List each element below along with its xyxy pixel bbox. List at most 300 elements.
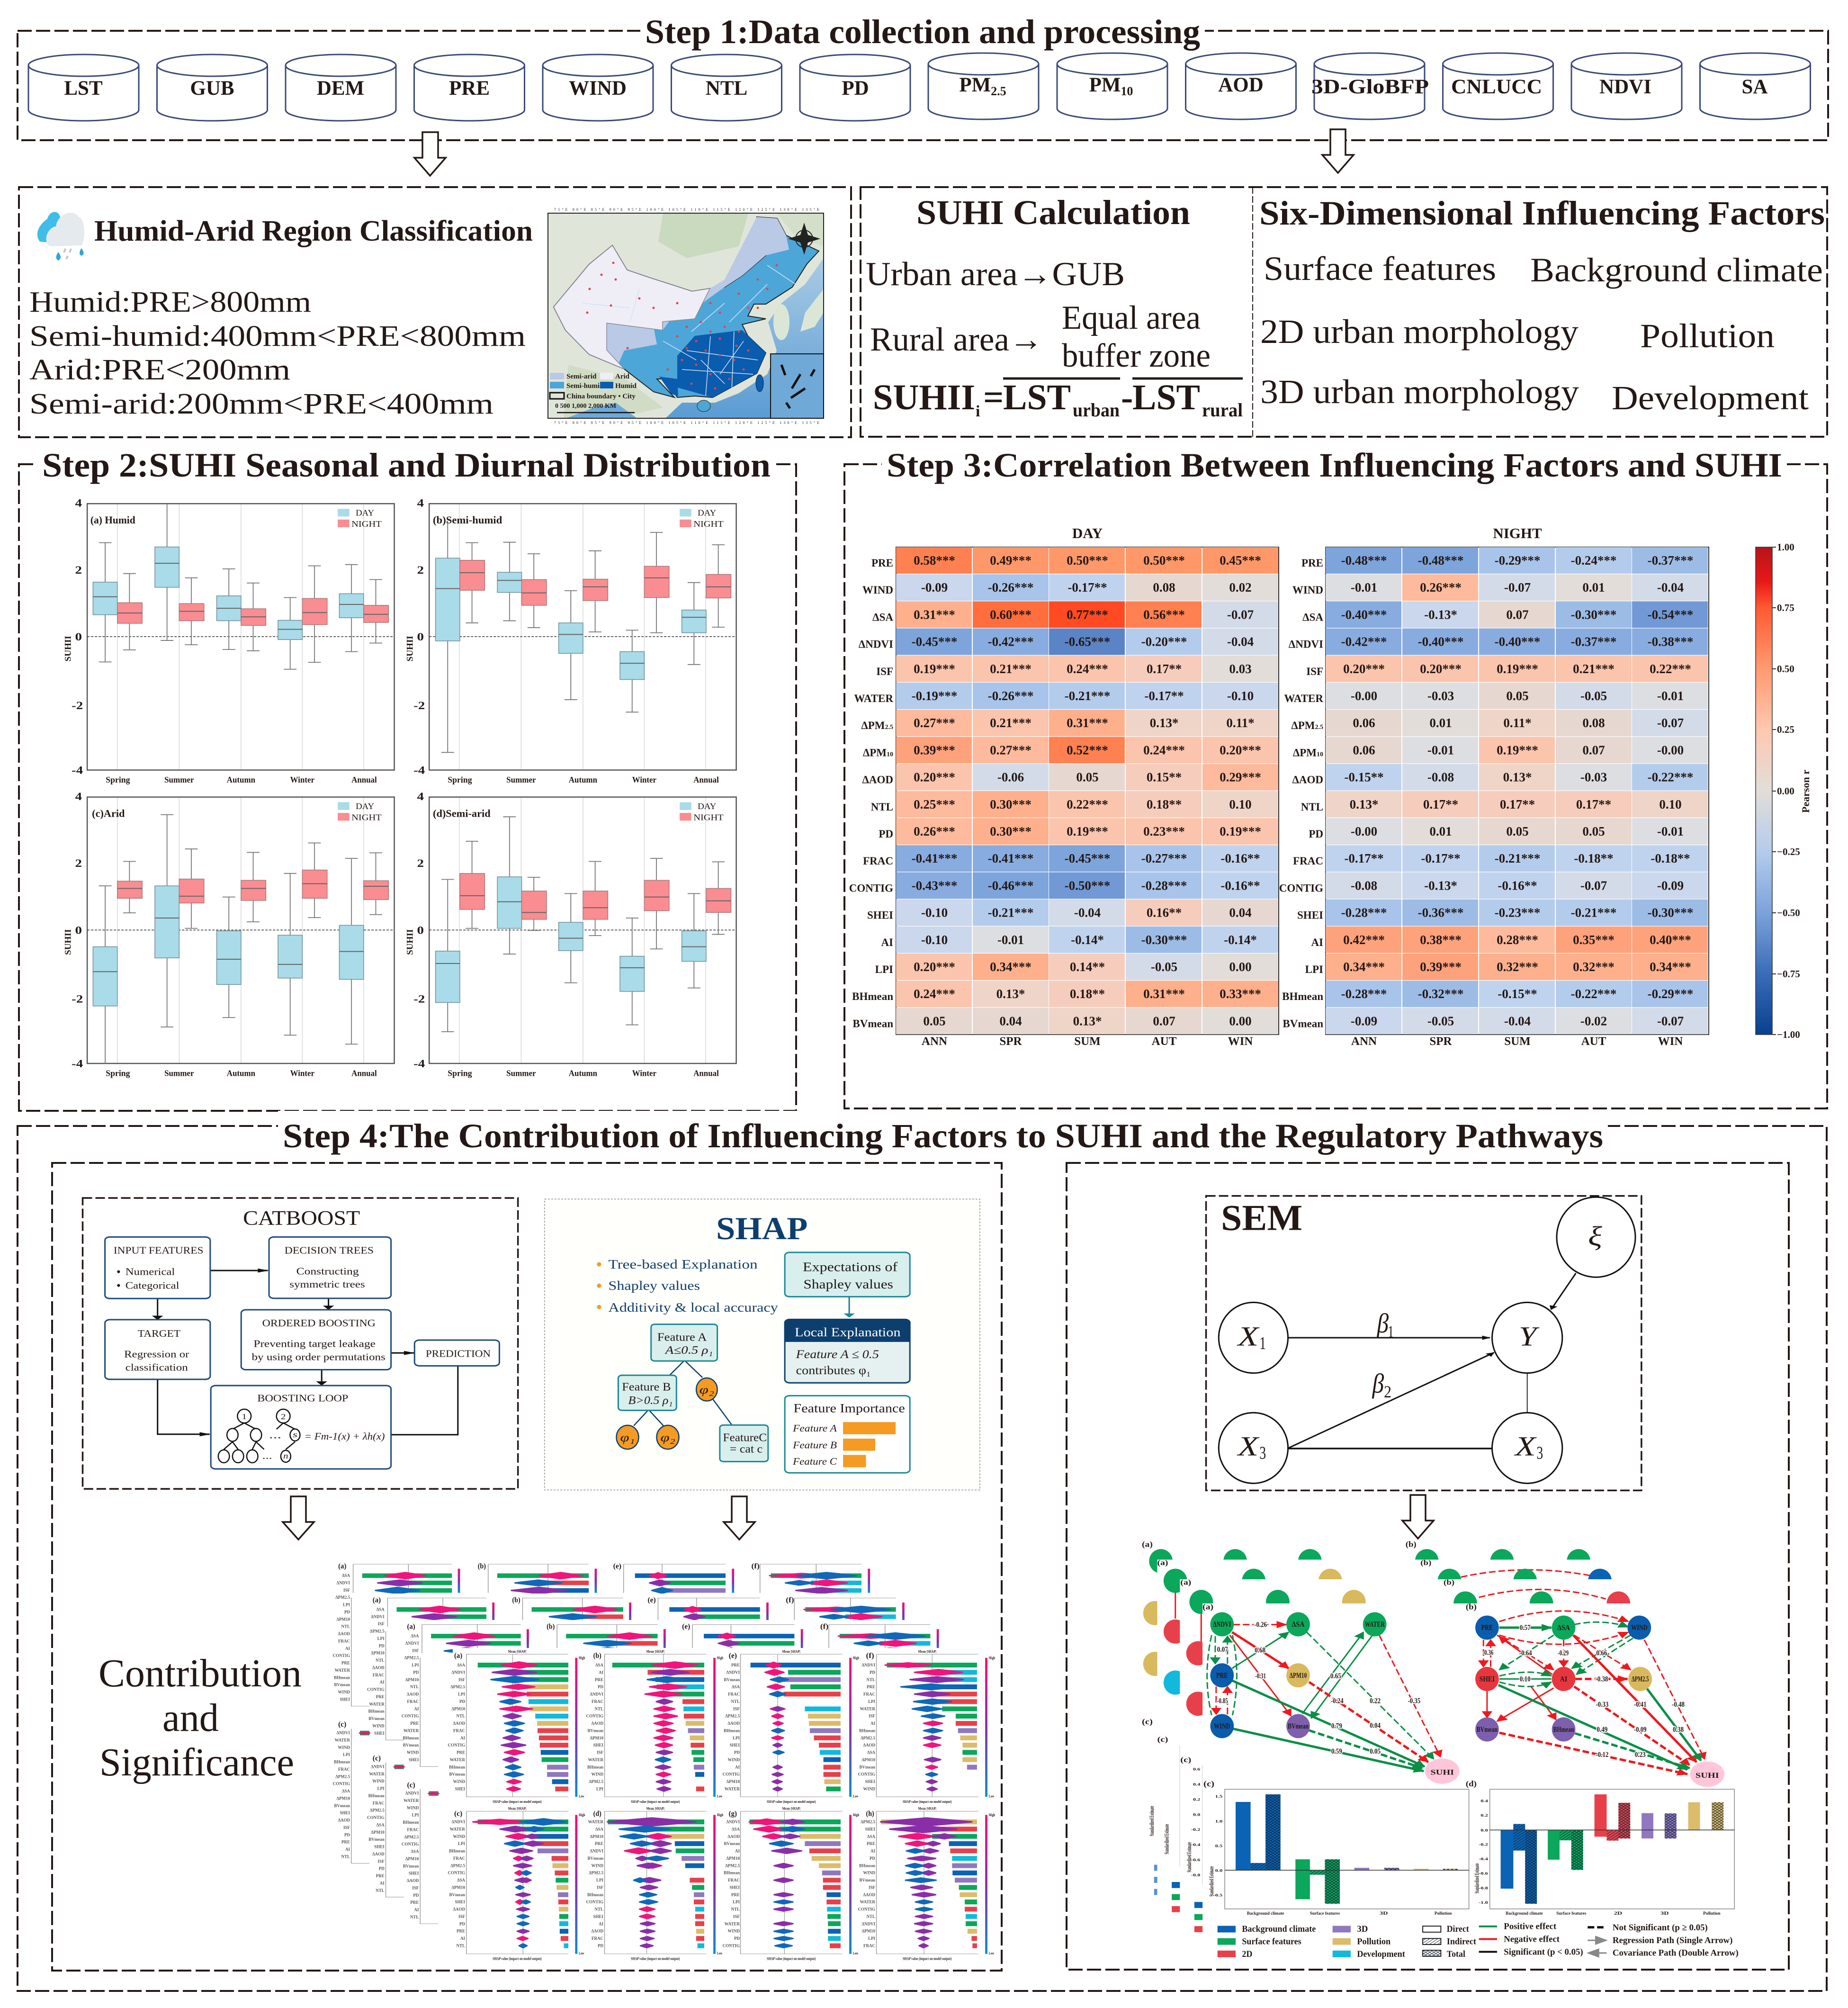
SHAP back layer template: FRAC [338, 1639, 350, 1643]
path diagram (a): 0.79 [1331, 1722, 1342, 1730]
panel titles: (c)Arid [92, 808, 125, 819]
SHAP bullets: Shapley values [609, 1279, 700, 1293]
heatmap day and night: 0.45*** [1220, 553, 1261, 567]
box: boosting loop: ... [262, 1450, 272, 1461]
heatmap day and night: 0.05 [1076, 770, 1099, 784]
box plot panel template: Winter [290, 775, 314, 784]
box: boosting loop: n [283, 1452, 288, 1460]
heatmap day and night: -0.29*** [1648, 987, 1693, 1001]
box plot panel template [63, 496, 395, 784]
panel: SUHI calculation and six-dimensional factors [861, 187, 1827, 437]
arrow: SEM to path diagrams [1402, 1495, 1434, 1539]
SHAP feature labels: CONTIG [722, 1943, 740, 1948]
SUHII formula: = [983, 378, 1004, 417]
heatmap day and night: -0.36*** [1418, 906, 1463, 920]
SEM labels: 1 [1388, 1323, 1394, 1341]
heatmap column labels: AUT [1581, 1035, 1606, 1048]
factor list: Pollution [1640, 317, 1775, 355]
heatmap day and night: SHEI [1297, 909, 1323, 921]
heatmap day and night: -0.30*** [1648, 906, 1693, 920]
SUHII formula: i [976, 403, 980, 420]
cylinder NTL: NTL [706, 77, 747, 99]
SHAP feature labels: LPI [868, 1699, 875, 1704]
SHAP feature labels: ΔPM2.5 [725, 1863, 740, 1868]
bar chart (d): Pollution [1703, 1910, 1721, 1916]
SHAP summary plots [448, 1650, 995, 1961]
path diagram (b): BVmean [1477, 1726, 1498, 1734]
SHAP swarm blue [491, 1676, 960, 1947]
colorbar: Pearson r: 1.00 [1777, 541, 1794, 553]
arrow: step 1 to SUHI calculation [1322, 129, 1354, 173]
heatmap day and night: NTL [1301, 801, 1323, 813]
legend: Positive effect [1504, 1921, 1557, 1931]
map legend: Arid [615, 373, 630, 380]
heatmap day and night: 0.11* [1503, 716, 1532, 730]
SHAP feature labels: SHEI [593, 1743, 603, 1747]
colorbar: Pearson r: −1.00 [1777, 1029, 1800, 1040]
cylinder PRE: PRE [449, 77, 490, 99]
SHAP feature labels: BVmean [859, 1878, 875, 1882]
SHAP feature labels: WATER [725, 1786, 740, 1791]
box plot panel template: 4 [75, 496, 82, 509]
SHAP feature labels: ΔAOD [591, 1721, 603, 1726]
SHAP feature labels: ΔSA [732, 1684, 740, 1689]
rural area definition [870, 299, 1211, 374]
SHAP bars blue [530, 1665, 977, 1931]
heatmap day and night: -0.05 [1580, 689, 1607, 703]
SHAP back layer template: BVmean [334, 1803, 350, 1808]
bar chart (d): Surface features [1556, 1910, 1587, 1916]
SHAP feature labels: ΔPM2.5 [725, 1714, 740, 1719]
legend: 3D [1357, 1924, 1368, 1934]
SHAP feature labels: FRAC [453, 1856, 465, 1861]
map compass [788, 223, 820, 255]
heatmap day and night: WATER [1284, 693, 1323, 704]
heatmap day and night: -0.13* [1424, 607, 1457, 621]
panel: humid-arid classification [19, 187, 851, 437]
heatmap day and night: 0.16** [1147, 906, 1182, 920]
panel: CatBoost: PREDICTION [426, 1348, 491, 1359]
heatmap day and night: 0.31*** [1067, 716, 1108, 730]
SHAP feature labels: FRAC [728, 1692, 740, 1697]
heatmap day and night: FRAC [1293, 855, 1323, 867]
SHAP feature labels: LPI [868, 1936, 875, 1941]
path diagram (a): -0.85 [1217, 1697, 1228, 1705]
path diagram (a): ΔSA [1292, 1621, 1304, 1629]
third layer nodes: 0.0 [1193, 1813, 1200, 1817]
heatmap day and night: 0.31*** [1143, 987, 1185, 1001]
heatmap day and night: AI [1311, 936, 1323, 948]
path diagram (a): WATER [1365, 1621, 1385, 1629]
SHAP feature labels: ISF [869, 1714, 875, 1719]
SHAP feature labels: PD [459, 1699, 465, 1704]
heatmap day and night: ΔPM10 [1293, 747, 1323, 758]
heatmap day and night: -0.41*** [912, 851, 957, 865]
third layer nodes: -0.8 [1191, 1873, 1200, 1877]
SHAP feature labels: ΔSA [867, 1750, 875, 1755]
panel: CatBoost: by using order permutations [251, 1351, 386, 1363]
SHAP feature labels: CONTIG [858, 1907, 875, 1912]
SHAP feature labels: ΔAOD [863, 1892, 875, 1897]
SHAP feature labels: ISF [597, 1750, 603, 1755]
colorbar: Pearson r: 0.25 [1777, 724, 1794, 735]
SHAP back layer template: AI [345, 1847, 350, 1852]
heatmap day and night: -0.15** [1344, 770, 1384, 784]
box plot panel template: 2 [75, 563, 82, 576]
SHAP feature labels: PRE [731, 1663, 740, 1667]
SHAP feature labels: LPI [596, 1786, 603, 1791]
heatmap day and night: -0.01 [1657, 824, 1684, 838]
SHAP feature labels: NTL [594, 1907, 603, 1912]
SHAP feature labels: ΔPM2.5 [589, 1871, 603, 1875]
SHAP bullets: Tree-based Explanation [609, 1257, 758, 1271]
box: target: Regression or [124, 1349, 189, 1360]
heatmap day and night: -0.03 [1580, 770, 1607, 784]
heatmap day and night: 0.05 [1506, 824, 1529, 838]
panel: CatBoost: CATBOOST [243, 1207, 360, 1230]
SHAP back layer template: ΔPM10 [336, 1617, 350, 1621]
second layer nodes: (b) [1420, 1559, 1431, 1567]
cylinder PM2.5: 2.5 [991, 84, 1006, 98]
heatmap day and night: -0.17** [1421, 851, 1461, 865]
SHAP feature labels: LPI [733, 1900, 740, 1904]
SHAP feature labels: ΔPM10 [726, 1779, 740, 1784]
heatmap day and night: -0.18** [1651, 851, 1690, 865]
factor list: 2D urban morphology [1260, 313, 1579, 351]
cylinder NTL [672, 54, 781, 121]
path diagram (a): 0.07 [1217, 1646, 1228, 1654]
SHAP feature labels: BHmean [859, 1728, 875, 1733]
SHAP swarm pink [473, 1662, 962, 1940]
cylinder PM2.5: PM [959, 74, 991, 96]
path diagram (b): WIND [1631, 1624, 1648, 1632]
map: China humidity zones [548, 207, 824, 425]
arrow: CatBoost to results [283, 1496, 314, 1540]
heatmap day and night: 0.21*** [990, 662, 1032, 676]
SEM labels: 3 [1536, 1443, 1543, 1463]
SHAP feature labels: ΔAOD [863, 1743, 875, 1747]
heatmap day and night: 0.34*** [1343, 960, 1385, 974]
SHAP feature labels: ΔNDVI [590, 1848, 603, 1853]
bar chart (d): Standardized Estimate [1474, 1863, 1480, 1893]
second layer nodes: (c) [1157, 1736, 1168, 1744]
SHAP back layer template: SHEI [340, 1697, 350, 1702]
colorbar: Pearson r: −0.75 [1777, 968, 1800, 980]
SHAP feature labels: WIND [591, 1772, 603, 1777]
cylinder WIND: WIND [569, 77, 627, 99]
SEM arrows [1289, 1273, 1576, 1449]
map: China humidity zones: 75°E 80°E 85°E 90°E 95°E 100°E 105°E 110°E 115°E 120°E 125°E 130°E 135°E [554, 207, 819, 212]
SHAP feature labels: NTL [731, 1907, 740, 1912]
arrows [158, 1270, 458, 1435]
box plot panel template: 0 [75, 630, 82, 643]
SHAP feature labels: ΔPM10 [861, 1929, 875, 1934]
SEM heading: SEM [1221, 1198, 1302, 1238]
map: China humidity zones: 75°E 80°E 85°E 90°E 95°E 100°E 105°E 110°E 115°E 120°E 125°E 130°E 135°E [554, 421, 819, 425]
chart (a) humid [93, 504, 388, 669]
SHAP back layer template: PRE [341, 1840, 350, 1845]
heatmap day and night: -0.37*** [1571, 635, 1616, 649]
SHAP feature labels: LPI [458, 1692, 465, 1697]
heatmap day and night: PRE [1301, 557, 1323, 569]
SHAP feature labels: CONTIG [586, 1900, 603, 1904]
SHAP feature labels: BHmean [449, 1848, 465, 1853]
heatmap day and night: -0.19*** [912, 689, 957, 703]
SHAP back layer template: PD [344, 1610, 350, 1614]
SHAP back layer template: WIND [338, 1690, 350, 1694]
heatmap day and night: ΔAOD [1292, 774, 1323, 786]
diagram letters: (d) [1466, 1779, 1477, 1788]
heatmap day and night: -0.28*** [1341, 906, 1387, 920]
SHAP feature labels: LPI [458, 1841, 465, 1846]
heatmap column labels: AUT [1152, 1035, 1177, 1048]
heatmap day and night: 0.08 [1153, 580, 1175, 594]
panel: CatBoost: = Fm-1(x) + λh(x) [305, 1431, 385, 1442]
heatmap day and night: 0.10 [1229, 797, 1252, 811]
cylinder WIND [543, 54, 653, 121]
heatmap day and night: ΔPM2.5 [1291, 720, 1323, 731]
heatmap day and night: -0.43*** [912, 878, 957, 892]
heatmap column labels: SPR [1429, 1035, 1453, 1048]
bar chart (c): 1.5 [1215, 1795, 1222, 1799]
heatmap column labels: SUM [1074, 1035, 1101, 1048]
SHAP feature labels: ΔAOD [453, 1907, 465, 1912]
SHAP tree: φ₁ [620, 1431, 635, 1444]
panel: CatBoost: INPUT FEATURES [114, 1245, 203, 1256]
cylinder 3D-GloBFP: 3D-GloBFP [1311, 76, 1429, 98]
heatmap day and night: -0.45*** [1065, 851, 1110, 865]
box: feature importance: Feature C [793, 1456, 837, 1467]
bar chart (d): Background climate [1506, 1910, 1543, 1916]
cylinder PRE [414, 54, 525, 121]
box plot panel template: Autumn [227, 775, 255, 784]
heatmap column labels: ANN [1351, 1035, 1377, 1048]
path diagram (b): -0.41 [1634, 1701, 1647, 1709]
SHAP back layer template: ΔPM2.5 [335, 1595, 350, 1600]
heatmap day and night: 0.13* [1350, 797, 1378, 811]
legend: Negative effect [1504, 1934, 1560, 1944]
SHAP back layer template [332, 1562, 870, 1863]
heatmap day and night: -0.40*** [1495, 635, 1540, 649]
second layer nodes [1149, 1559, 1612, 1912]
step 4 title: Step 4:The Contribution of Influencing Factors to SUHI and the Regulatory Pathways [283, 1117, 1603, 1155]
step 1 title: Step 1:Data collection and processing [645, 13, 1200, 51]
SHAP back layer template: PRE [341, 1661, 350, 1666]
SHAP feature labels: ISF [597, 1885, 603, 1890]
SHAP feature labels: BVmean [587, 1856, 603, 1861]
text: contribution and significance [99, 1651, 302, 1784]
SHAP tree [617, 1324, 768, 1461]
heatmap day and night: CONTIG [1279, 882, 1323, 894]
SHAP feature labels: FRAC [592, 1936, 603, 1941]
factor list [1260, 250, 1823, 417]
SEM labels: β [1372, 1368, 1384, 1399]
path diagram (b): PRE [1481, 1624, 1493, 1632]
heatmap day and night: -0.37*** [1648, 553, 1693, 567]
SHAP panel letters: (a) [454, 1652, 462, 1660]
SHAP feature labels: WIND [453, 1834, 465, 1839]
SHAP bars red [527, 1672, 977, 1946]
SHAP feature labels: PRE [595, 1841, 603, 1846]
path diagram (a): -0.24 [1331, 1697, 1344, 1705]
panel: SEM schematic [1206, 1196, 1642, 1490]
cylinder PD [800, 54, 910, 121]
third layer nodes: 0.6 [1193, 1767, 1200, 1772]
SHAP back layer template: ISF [343, 1588, 350, 1593]
SHAP feature labels: AI [460, 1736, 465, 1740]
panel titles: (d)Semi-arid [433, 808, 491, 819]
heatmap day and night: ΔSA [1302, 611, 1323, 623]
SHAP back layer template: BVmean [334, 1683, 350, 1687]
bar chart (c): 0.5 [1215, 1844, 1222, 1848]
SHAP feature labels: AI [599, 1921, 603, 1926]
SHAP feature labels: ΔNDVI [451, 1670, 465, 1675]
SHAP feature labels: WIND [863, 1786, 875, 1791]
SHAP tree: φ₂ [700, 1383, 714, 1396]
heatmap day and night: 0.19*** [1497, 743, 1538, 757]
box: feature importance [785, 1396, 910, 1473]
path diagram (b): BHmean [1553, 1726, 1574, 1734]
SHAP back layer template: AI [345, 1646, 350, 1651]
legend: Development [1357, 1949, 1405, 1959]
box plot panel template: DAY [356, 508, 374, 518]
path diagram (b): -0.12 [1596, 1751, 1608, 1759]
step 2 title: Step 2:SUHI Seasonal and Diurnal Distribution [42, 446, 771, 484]
box: target: TARGET [138, 1328, 180, 1339]
heatmap day and night: -0.16** [1498, 878, 1537, 892]
heatmap day and night: -0.45*** [912, 635, 957, 649]
heatmap day and night: 0.22*** [1067, 797, 1108, 811]
heatmap day and night: 0.77*** [1067, 607, 1108, 621]
heatmap day and night: 0.58*** [914, 553, 955, 567]
SHAP feature labels: ΔSA [867, 1834, 875, 1839]
SEM labels: 3 [1259, 1443, 1266, 1463]
SHAP feature labels: PRE [867, 1684, 875, 1689]
legend: Significant (p < 0.05) [1504, 1947, 1583, 1957]
heatmap day and night: 0.19*** [1220, 824, 1261, 838]
SHAP feature labels: WIND [727, 1757, 740, 1762]
bar chart (d) [1474, 1789, 1734, 1916]
SHAP feature labels: PD [734, 1750, 740, 1755]
box: boosting loop: 2 [281, 1413, 286, 1421]
heatmap day and night: WATER [854, 693, 893, 704]
SUHII formula: - [1121, 378, 1133, 417]
heatmap day and night: ΔSA [872, 611, 893, 623]
heatmap day and night: PRE [871, 557, 893, 569]
heatmap day and night: ΔPM2.5 [861, 720, 893, 731]
heatmap day and night: -0.48*** [1418, 553, 1463, 567]
SHAP feature labels: BVmean [724, 1841, 740, 1846]
bar chart (d): 2D [1614, 1910, 1622, 1916]
SHAP feature labels: ΔAOD [727, 1834, 740, 1839]
arrow: SHAP to results [724, 1496, 755, 1540]
SHAP feature labels: AI [735, 1848, 740, 1853]
heatmap day and night: -0.22*** [1648, 770, 1693, 784]
heatmap day and night: 0.00 [1229, 1014, 1252, 1028]
SHAP back layer template: WATER [335, 1738, 350, 1742]
SHAP feature labels: LPI [596, 1878, 603, 1882]
heatmap column labels: SUM [1504, 1035, 1531, 1048]
bar chart (d): -0.2 [1479, 1843, 1488, 1847]
heatmap day and night: 0.17** [1147, 662, 1182, 676]
SHAP feature labels: SHEI [593, 1914, 603, 1919]
path diagram (b): SHEI [1480, 1675, 1495, 1683]
path diagram (a): -0.31 [1255, 1673, 1266, 1680]
SHAP feature labels: PD [459, 1921, 465, 1926]
SHAP back layer template: SHEI [340, 1810, 350, 1815]
cylinder CNLUCC [1443, 53, 1553, 119]
heatmap day and night: 0.25*** [914, 797, 955, 811]
heatmap day and night: 0.56*** [1143, 607, 1185, 621]
SHAP front mask [453, 1648, 997, 1965]
heatmap day and night: -0.18** [1574, 851, 1614, 865]
heatmap day and night: FRAC [863, 855, 893, 867]
SHAP feature labels: PD [870, 1856, 875, 1861]
back layer labels: (a) [1142, 1540, 1153, 1549]
SHAP feature labels: WATER [725, 1921, 740, 1926]
SHAP back layer template: (a) [338, 1562, 346, 1570]
heatmap column labels: ANN [922, 1035, 947, 1048]
heatmap day and night: -0.01 [997, 933, 1024, 947]
heatmap day and night: 0.20*** [1420, 662, 1462, 676]
heatmap day and night: -0.03 [1427, 689, 1454, 703]
classification rules: Semi-humid:400mm<PRE<800mm [29, 320, 526, 352]
SHAP feature labels: WIND [727, 1929, 740, 1934]
path diagram (a): -0.26 [1254, 1621, 1267, 1629]
box: input features [105, 1237, 210, 1298]
heatmap day and night: 0.33*** [1220, 987, 1261, 1001]
SHAP plot frame template: Mean |SHAP| [508, 1650, 526, 1654]
heatmap day and night: -0.26*** [988, 580, 1033, 594]
heatmap day and night: 0.39*** [914, 743, 955, 757]
SHAP feature labels: AI [735, 1765, 740, 1769]
SHAP swarm purple [493, 1670, 971, 1947]
heatmap day and night: -0.40*** [1341, 607, 1387, 621]
cylinder SA [1700, 53, 1810, 119]
factor list: 3D urban morphology [1260, 373, 1579, 411]
path diagram (a): ΔPM10 [1290, 1672, 1307, 1680]
heatmap day and night: 0.19*** [1497, 662, 1538, 676]
heatmap day and night [849, 547, 1709, 1048]
panel: SHAP: SHAP [716, 1211, 807, 1246]
SHAP feature labels: SHEI [729, 1743, 740, 1747]
panel: CatBoost: Preventing target leakage [253, 1338, 376, 1349]
path diagram (b): -0.33 [1596, 1701, 1608, 1709]
path diagram (b): ΔSA [1557, 1624, 1570, 1632]
SHAP feature labels: ΔSA [732, 1827, 740, 1831]
heatmap day and night: -0.24*** [1571, 553, 1616, 567]
back layer labels [1142, 1540, 1417, 1726]
heatmap day and night: -0.08 [1427, 770, 1454, 784]
SHAP back layer template: BHmean [334, 1675, 350, 1680]
legend: Direct [1447, 1924, 1469, 1934]
classification rules [29, 286, 526, 420]
heatmap day and night: -0.06 [997, 770, 1024, 784]
third layer nodes: -0.2 [1191, 1828, 1200, 1832]
SHAP back layer template: WIND [338, 1745, 350, 1750]
path diagram (b) [1475, 1611, 1724, 1787]
SHAP feature labels: CONTIG [722, 1772, 740, 1777]
SHAP feature labels: PRE [457, 1750, 465, 1755]
SHAP back layer template: (b) [478, 1562, 486, 1570]
cylinder 3D-GloBFP [1311, 53, 1429, 119]
box plot panel template: Spring [106, 775, 130, 784]
diagram letters: (a) [1202, 1603, 1213, 1612]
path diagram (a): BVmean [1288, 1722, 1309, 1730]
panel: SHAP: Expectations of [803, 1260, 897, 1274]
path diagram (b): 0.23 [1635, 1751, 1646, 1759]
SHAP back layer template: LPI [343, 1752, 350, 1757]
